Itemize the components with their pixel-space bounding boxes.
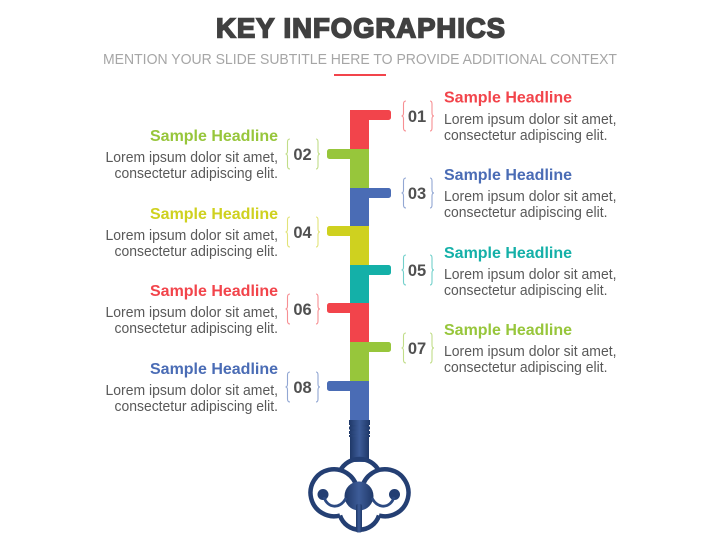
item 05: Sample Headline [444,245,572,262]
item 02: consectetur adipiscing elit. [114,166,278,182]
item 07: 07 [408,340,426,358]
item 05 [402,245,616,299]
item 02 [106,128,320,182]
item 07 [402,322,616,376]
key handle [310,420,409,532]
item 05: consectetur adipiscing elit. [444,283,608,299]
item 05: Lorem ipsum dolor sit amet, [444,267,616,283]
item 02: Sample Headline [150,128,278,145]
item 06: Lorem ipsum dolor sit amet, [106,305,278,321]
item 05: 05 [408,262,426,280]
item 02: 02 [293,146,312,164]
item 01: consectetur adipiscing elit. [444,128,608,144]
key shaft with colored segments and branches [327,110,391,420]
item 06: 06 [293,301,312,319]
item 03: consectetur adipiscing elit. [444,205,608,221]
item 04: 04 [293,224,312,242]
item 01: Lorem ipsum dolor sit amet, [444,112,616,128]
item 04 [106,206,320,260]
item 03: Sample Headline [444,167,572,184]
subtitle: MENTION YOUR SLIDE SUBTITLE HERE TO PROVIDE ADDITIONAL CONTEXT [103,51,617,68]
item 02: Lorem ipsum dolor sit amet, [106,150,278,166]
item 08: 08 [293,379,312,397]
item 06: consectetur adipiscing elit. [114,321,278,337]
item 04: Sample Headline [150,206,278,223]
item 03 [402,167,616,221]
item 07: consectetur adipiscing elit. [444,360,608,376]
item 08: consectetur adipiscing elit. [114,399,278,415]
item 07: Lorem ipsum dolor sit amet, [444,344,616,360]
title: KEY INFOGRAPHICS [216,13,505,44]
item 04: consectetur adipiscing elit. [114,244,278,260]
item 03: 03 [408,185,426,203]
item 01: Sample Headline [444,90,572,106]
item 04: Lorem ipsum dolor sit amet, [106,228,278,244]
item 01 [402,90,616,144]
item 06: Sample Headline [150,283,278,300]
item 07: Sample Headline [444,322,572,339]
item 08: Lorem ipsum dolor sit amet, [106,383,278,399]
item 06 [106,283,320,337]
item 01: 01 [408,108,426,126]
item 08 [106,361,320,415]
item 08: Sample Headline [150,361,278,378]
title accent line [334,74,386,76]
item 03: Lorem ipsum dolor sit amet, [444,189,616,205]
